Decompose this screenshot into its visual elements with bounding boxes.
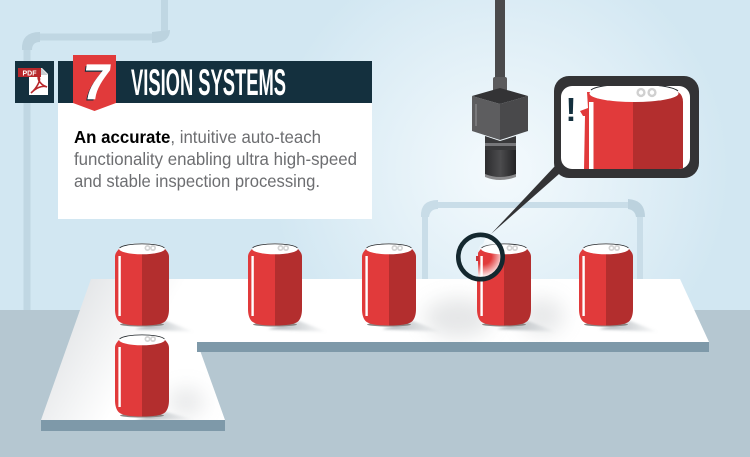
PDF icon xyxy=(15,61,54,103)
body text xyxy=(74,127,357,191)
callout: magnified defect xyxy=(554,76,699,178)
can shadows xyxy=(135,298,659,420)
pipe: behind conveyor xyxy=(421,199,645,280)
conveyor table xyxy=(41,279,709,431)
text: VISION SYSTEMS xyxy=(131,62,286,103)
magnifier circle xyxy=(458,235,503,281)
body text: and stable inspection processing. xyxy=(74,171,320,191)
can 5 xyxy=(579,243,633,326)
can 3 xyxy=(362,243,416,326)
panel: text card xyxy=(58,103,372,219)
floor xyxy=(0,310,750,457)
callout tail xyxy=(491,166,559,234)
number badge: 7 xyxy=(78,56,112,111)
camera xyxy=(472,0,528,180)
pipe: upper left xyxy=(22,0,170,310)
number badge: 7 xyxy=(79,54,114,110)
background wall xyxy=(0,0,750,310)
can 1 xyxy=(115,243,169,326)
header bar xyxy=(58,61,372,103)
can 2 xyxy=(248,243,302,326)
body text: An accurate, intuitive auto-teach xyxy=(74,127,321,147)
can 6: lower conveyor xyxy=(115,334,169,418)
exclamation mark: ! xyxy=(566,91,576,128)
body text: functionality enabling ultra high-speed xyxy=(74,149,357,169)
PDF icon: PDF xyxy=(22,70,37,77)
can 4: defective xyxy=(477,243,531,326)
